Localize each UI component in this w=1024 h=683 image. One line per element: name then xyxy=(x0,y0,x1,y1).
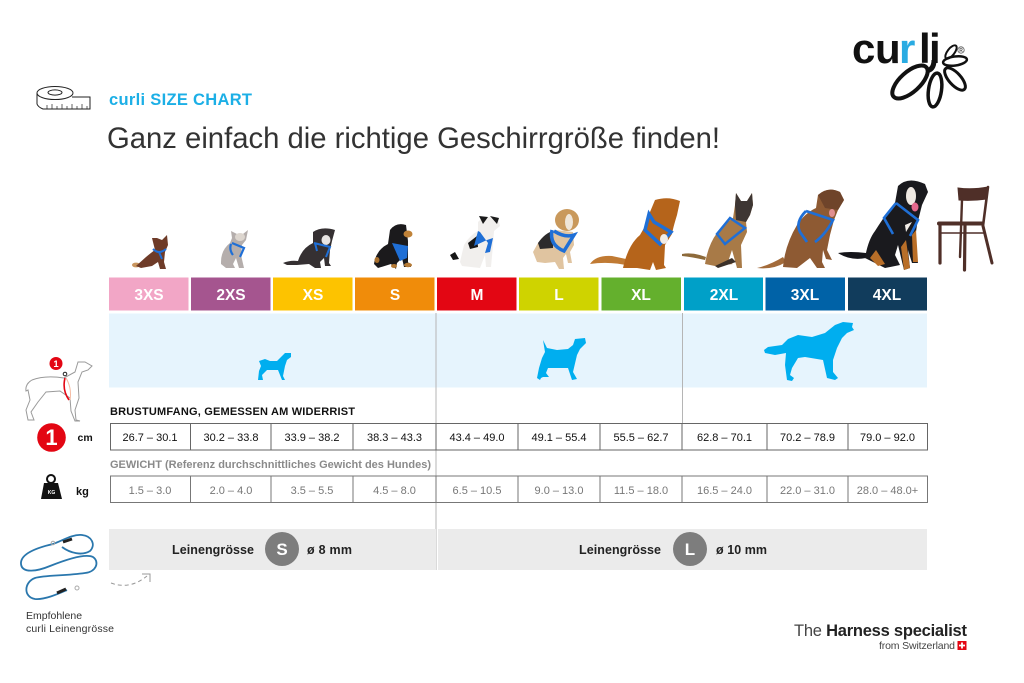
icon: weight kg xyxy=(41,475,89,499)
caption: recommended leash size: Empfohlene xyxy=(26,610,82,622)
icon: measuring tape xyxy=(37,86,90,109)
illustration: chair xyxy=(939,187,992,270)
band: 3XL xyxy=(766,278,845,310)
icon: medium dog xyxy=(537,338,586,380)
icon: weight kg: KG xyxy=(48,490,55,496)
table: chest girth in cm: 38.3 – 43.3 xyxy=(367,432,422,444)
dog: 4XL xyxy=(838,180,928,270)
tagline: the harness specialist xyxy=(794,622,968,652)
dog: 3XL xyxy=(757,190,844,268)
badge: 1 cm xyxy=(37,423,93,452)
icon: dog with chest measurement xyxy=(26,357,92,421)
arrow: dashed pointer xyxy=(111,574,150,585)
heading: curli size chart: curli SIZE CHART xyxy=(109,91,252,109)
icon: small dog xyxy=(258,353,291,380)
table: chest girth in cm: 33.9 – 38.2 xyxy=(284,432,340,444)
tagline: the harness specialist: from Switzerland xyxy=(879,640,955,652)
badge: 1 cm: 1 xyxy=(45,425,58,450)
table: weight in kg: 16.5 – 24.0 xyxy=(697,485,752,497)
table: chest girth in cm: 43.4 – 49.0 xyxy=(449,432,505,444)
table: chest girth in cm: 62.8 – 70.1 xyxy=(697,432,752,444)
tagline: the harness specialist: The Harness specialist xyxy=(794,622,968,640)
size bands xyxy=(109,278,927,310)
table: chest girth in cm: 49.1 – 55.4 xyxy=(531,432,587,444)
bar: leash size L: Leinengrösse xyxy=(579,543,661,557)
band: 4XL xyxy=(848,278,927,310)
dog photos row xyxy=(132,180,928,270)
panel: dog size silhouettes xyxy=(109,314,927,388)
dog: M xyxy=(450,216,500,268)
band: 2XS xyxy=(191,278,270,310)
band: L: L xyxy=(554,287,564,304)
band: 4XL: 4XL xyxy=(873,287,901,304)
logo: curli: R xyxy=(959,48,963,54)
band: XL: XL xyxy=(631,287,651,304)
table: chest girth in cm: 70.2 – 78.9 xyxy=(780,432,835,444)
table: weight in kg: 1.5 – 3.0 xyxy=(129,485,171,497)
caption: recommended leash size xyxy=(26,610,114,635)
table: chest girth in cm: 30.2 – 33.8 xyxy=(203,432,259,444)
bar: leash size L: ø 10 mm xyxy=(716,543,767,557)
dog: S xyxy=(374,224,412,269)
table: chest girth in cm: 26.7 – 30.1 xyxy=(122,432,178,444)
band: S: S xyxy=(390,287,400,304)
table: weight in kg: 3.5 – 5.5 xyxy=(291,485,333,497)
logo: curli xyxy=(852,25,969,108)
badge: 1 cm: cm xyxy=(78,432,93,444)
icon: leash xyxy=(21,535,96,599)
bar: leash size L: L xyxy=(685,540,695,559)
dog: 2XL xyxy=(682,193,753,268)
bar: leash size S xyxy=(109,529,436,570)
table: chest girth in cm: 79.0 – 92.0 xyxy=(860,432,915,444)
table: weight in kg: 28.0 – 48.0+ xyxy=(857,485,918,497)
dog: L xyxy=(533,209,579,269)
caption: recommended leash size: curli Leinengrösse xyxy=(26,623,114,635)
table: chest girth in cm: 55.5 – 62.7 xyxy=(613,432,669,444)
icon: large dog xyxy=(764,322,854,381)
band: 2XS: 2XS xyxy=(216,287,246,304)
band: XS: XS xyxy=(303,287,323,304)
heading: weight: GEWICHT (Referenz durchschnittliches Gewicht des Hundes) xyxy=(110,459,431,471)
table: weight in kg xyxy=(110,476,928,502)
band: XL xyxy=(602,278,681,310)
dog: 3XS xyxy=(132,235,168,269)
divider lines xyxy=(436,313,682,570)
icon: weight kg: kg xyxy=(76,486,89,498)
dog: XL xyxy=(590,198,680,270)
bar: leash size L xyxy=(438,529,927,570)
table: weight in kg: 4.5 – 8.0 xyxy=(373,485,416,497)
bar: leash size S: S xyxy=(276,540,288,559)
table: weight in kg: 22.0 – 31.0 xyxy=(780,485,835,497)
band: L xyxy=(519,278,598,310)
dog: 2XS xyxy=(221,230,248,268)
bar: leash size S: ø 8 mm xyxy=(307,543,352,557)
table: weight in kg: 2.0 – 4.0 xyxy=(210,485,252,497)
band: 2XL xyxy=(684,278,763,310)
band: XS xyxy=(273,278,352,310)
band: M xyxy=(437,278,516,310)
band: 3XL: 3XL xyxy=(791,287,819,304)
table: chest girth in cm xyxy=(110,424,928,450)
band: M: M xyxy=(471,287,483,304)
bar: leash size S: Leinengrösse xyxy=(172,543,254,557)
table: weight in kg: 6.5 – 10.5 xyxy=(453,485,501,497)
logo: curli: curli xyxy=(852,25,941,72)
band: 3XS: 3XS xyxy=(134,287,164,304)
table: weight in kg: 9.0 – 13.0 xyxy=(535,485,583,497)
dog: XS xyxy=(283,228,335,268)
band: 3XS xyxy=(109,278,188,310)
icon: dog with chest measurement: 1 xyxy=(53,359,59,370)
table: weight in kg: 11.5 – 18.0 xyxy=(614,485,668,497)
title: Ganz einfach die richtige Geschirrgröße finden! xyxy=(107,122,720,155)
band: 2XL: 2XL xyxy=(710,287,738,304)
heading: chest measurement: BRUSTUMFANG, GEMESSEN AM WIDERRIST xyxy=(110,406,355,418)
band: S xyxy=(355,278,434,310)
